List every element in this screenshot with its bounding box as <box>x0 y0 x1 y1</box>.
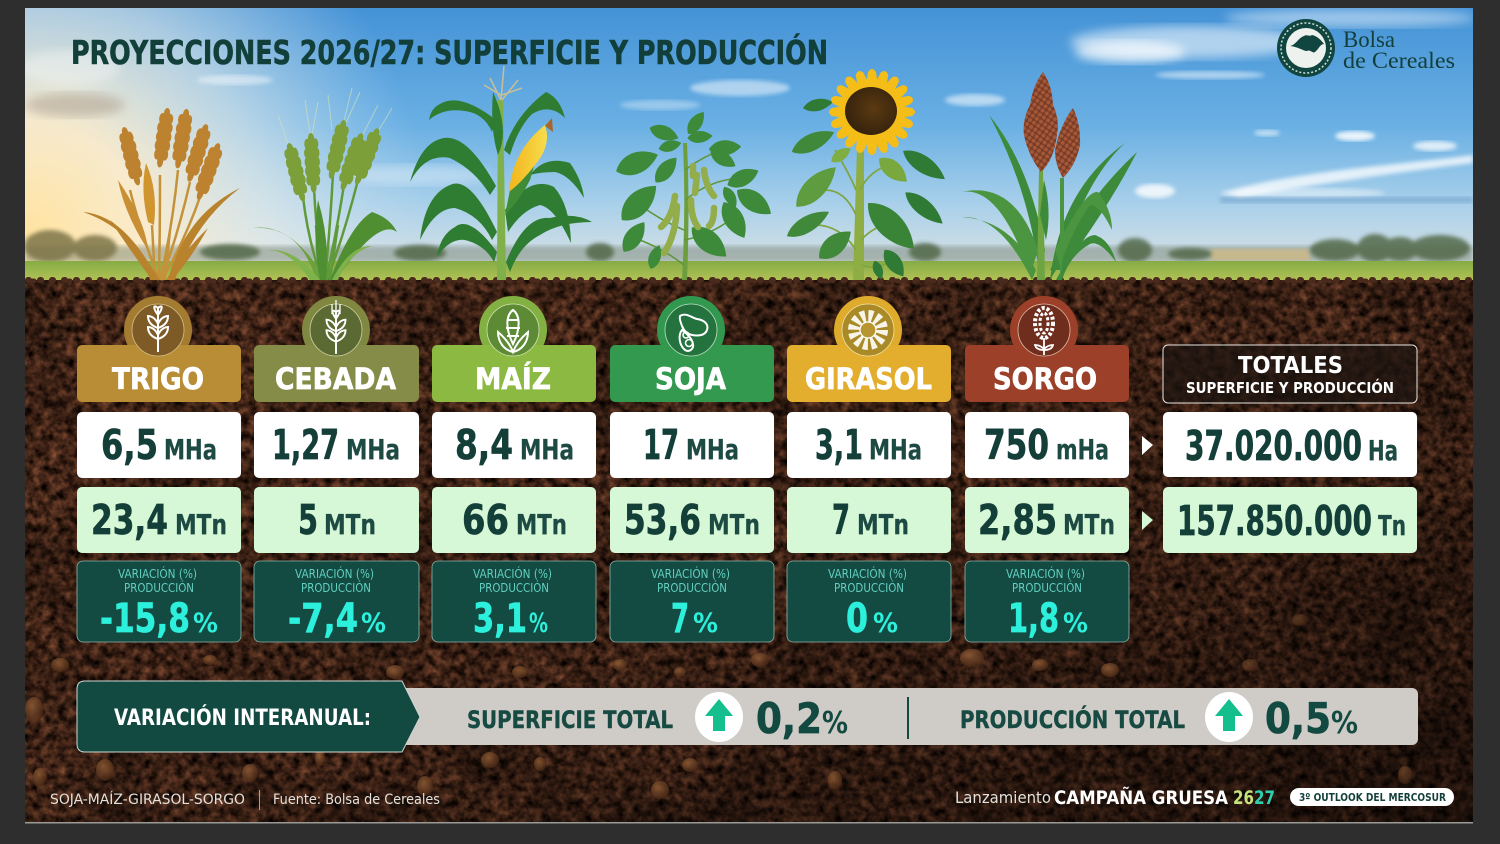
variation: % <box>529 608 548 639</box>
footer right: 26 <box>1233 787 1254 809</box>
production value: MTn <box>708 508 760 541</box>
crop column: maiz <box>432 296 596 642</box>
variation: PRODUCCIÓN <box>657 580 727 595</box>
superficie value: % <box>822 706 848 741</box>
surface value <box>77 412 241 478</box>
production value: 7 <box>832 496 850 544</box>
logo: Bolsa de Cereales: de Cereales <box>1343 48 1455 73</box>
variation: VARIACIÓN (%) <box>295 566 374 581</box>
badge backing <box>302 296 370 364</box>
surface value: MHa <box>869 433 922 466</box>
production value: 5 <box>298 496 318 544</box>
crop column: cebada <box>254 296 419 642</box>
badge backing <box>834 296 902 364</box>
production value: MTn <box>857 508 909 541</box>
production value: 66 <box>462 496 509 544</box>
crop column: soja <box>610 296 774 642</box>
variation: VARIACIÓN (%) <box>1006 566 1085 581</box>
horizon tree line <box>24 230 1473 262</box>
footer right: Lanzamiento <box>955 788 1051 807</box>
crop column: girasol <box>787 296 951 642</box>
plant: cebada <box>253 88 397 280</box>
logo: Bolsa de Cereales: Bolsa <box>1343 27 1395 52</box>
surface value <box>610 412 774 478</box>
produccion total: PRODUCCIÓN TOTAL <box>960 704 1185 734</box>
arrow: production to total <box>1142 511 1153 530</box>
variation <box>432 561 596 642</box>
footer right: CAMPAÑA GRUESA <box>1054 785 1228 809</box>
soil <box>25 280 1473 822</box>
footer right <box>955 785 1454 809</box>
header: soja <box>610 345 774 402</box>
surface value: MHa <box>686 433 739 466</box>
badge backing <box>124 296 192 364</box>
icon: up arrow <box>1205 692 1253 742</box>
footer left: SOJA-MAÍZ-GIRASOL-SORGO <box>50 791 245 808</box>
sky scene <box>20 8 1475 270</box>
variation: % <box>193 608 218 639</box>
crop column: trigo <box>77 296 241 642</box>
total surface: Ha <box>1368 434 1398 467</box>
variation: VARIACIÓN (%) <box>651 566 730 581</box>
production value <box>432 487 596 553</box>
variation: PRODUCCIÓN <box>479 580 549 595</box>
footer left: Fuente: Bolsa de Cereales <box>273 792 440 808</box>
production value: 2,85 <box>978 496 1057 544</box>
badge backing <box>479 296 547 364</box>
header: trigo <box>77 345 241 402</box>
icon: sunflower badge <box>842 304 894 356</box>
variation: 3,1 <box>473 596 527 642</box>
surface value: 750 <box>984 421 1049 469</box>
totals header <box>1163 345 1417 403</box>
variation: VARIACIÓN (%) <box>473 566 552 581</box>
total production: 157.850.000 <box>1177 497 1372 545</box>
variation <box>610 561 774 642</box>
header: girasol: GIRASOL <box>805 362 932 396</box>
plant: soja <box>612 108 777 280</box>
variation: PRODUCCIÓN <box>1012 580 1082 595</box>
variation: -7,4 <box>288 596 358 642</box>
surface value <box>965 412 1129 478</box>
variation <box>787 561 951 642</box>
production value: 23,4 <box>91 496 168 544</box>
variation: % <box>693 608 718 639</box>
surface value: 8,4 <box>455 421 513 469</box>
variation: PRODUCCIÓN <box>301 580 371 595</box>
footer left <box>50 790 440 810</box>
surface value <box>432 412 596 478</box>
arrow: surface to total <box>1142 436 1153 455</box>
plant: trigo <box>83 107 240 280</box>
surface value: MHa <box>520 433 574 466</box>
icon: up arrow <box>695 692 743 742</box>
variation: % <box>1063 608 1088 639</box>
badge backing <box>1010 296 1078 364</box>
production value <box>965 487 1129 553</box>
variation <box>965 561 1129 642</box>
production value: 53,6 <box>624 496 701 544</box>
header: girasol <box>787 345 951 402</box>
light bar <box>400 688 1418 745</box>
variation: VARIACIÓN (%) <box>828 566 907 581</box>
production value <box>787 487 951 553</box>
variation: PRODUCCIÓN <box>124 580 194 595</box>
surface value: 3,1 <box>815 421 863 469</box>
superficie value: 0,2 <box>756 694 822 743</box>
variation: % <box>361 608 386 639</box>
plant: girasol <box>783 69 950 281</box>
header: sorgo <box>965 345 1129 402</box>
total production: Tn <box>1378 509 1406 542</box>
surface value <box>254 412 419 478</box>
variation: 0 <box>846 596 868 642</box>
production value <box>254 487 419 553</box>
logo: Bolsa de Cereales <box>1277 19 1455 77</box>
green field <box>25 261 1473 282</box>
icon: wheat badge <box>132 304 184 356</box>
variation: PRODUCCIÓN <box>834 580 904 595</box>
total surface: 37.020.000 <box>1185 422 1362 470</box>
variation: -15,8 <box>100 596 190 642</box>
icon: corn badge <box>487 304 539 356</box>
production value: MTn <box>516 508 567 541</box>
surface value <box>787 412 951 478</box>
totals header: TOTALES <box>1238 353 1343 379</box>
pill: outlook <box>1290 788 1454 806</box>
surface value: mHa <box>1056 433 1109 466</box>
badge backing <box>657 296 725 364</box>
icon: sorghum badge <box>1018 304 1070 356</box>
pill: outlook: 3º OUTLOOK DEL MERCOSUR <box>1299 791 1446 804</box>
totals header: SUPERFICIE Y PRODUCCIÓN <box>1186 378 1394 397</box>
title: PROYECCIONES 2026/27: SUPERFICIE Y PRODUCCIÓN <box>71 32 828 72</box>
produccion value: % <box>1331 706 1358 741</box>
total surface <box>1163 412 1417 477</box>
produccion value: 0,5 <box>1265 694 1331 743</box>
variation: % <box>873 608 898 639</box>
dark label: VARIACIÓN INTERANUAL: <box>114 705 371 731</box>
banner: variacion interanual <box>77 681 1418 752</box>
header: maiz <box>432 345 596 402</box>
header: sorgo: SORGO <box>993 362 1097 396</box>
plant: sorgo <box>961 72 1137 280</box>
header: maiz: MAÍZ <box>475 362 551 396</box>
header: cebada: CEBADA <box>275 362 396 396</box>
variation: 7 <box>671 596 689 642</box>
variation: 1,8 <box>1008 596 1059 642</box>
production value <box>610 487 774 553</box>
dark label <box>77 681 420 752</box>
icon: barley badge <box>310 300 362 356</box>
variation <box>77 561 241 642</box>
variation: VARIACIÓN (%) <box>118 566 197 581</box>
total production <box>1163 487 1417 553</box>
surface value: 17 <box>643 421 679 469</box>
header: trigo: TRIGO <box>112 362 204 396</box>
production value: MTn <box>1063 508 1115 541</box>
header: cebada <box>254 345 419 402</box>
surface value: MHa <box>164 433 217 466</box>
plant: maiz <box>410 66 592 280</box>
surface value: 1,27 <box>272 421 339 469</box>
panel: totales <box>1163 345 1417 553</box>
crop column: sorgo <box>965 296 1129 642</box>
variation <box>254 561 419 642</box>
superficie total: SUPERFICIE TOTAL <box>467 706 673 734</box>
surface value: 6,5 <box>101 421 158 469</box>
production value: MTn <box>175 508 227 541</box>
surface value: MHa <box>346 433 400 466</box>
footer right: 27 <box>1254 787 1275 809</box>
icon: soybean badge <box>665 304 717 356</box>
production value: MTn <box>324 508 376 541</box>
divider <box>907 697 909 739</box>
production value <box>77 487 241 553</box>
header: soja: SOJA <box>655 362 726 396</box>
